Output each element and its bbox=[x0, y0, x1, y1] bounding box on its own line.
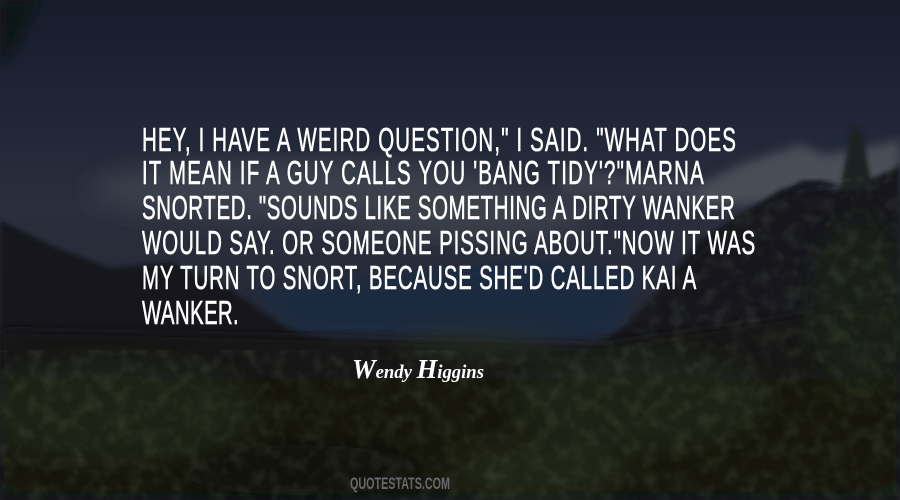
line 5: MY TURN TO SNORT, BECAUSE SHE'D CALLED KAI A bbox=[142, 259, 697, 296]
line 2: IT MEAN IF A GUY CALLS YOU 'BANG TIDY'?"MARNA bbox=[142, 154, 704, 191]
watermark: QUOTESTATS.COM bbox=[350, 474, 450, 493]
left hills bbox=[0, 220, 330, 500]
line 6: WANKER. bbox=[142, 294, 239, 331]
lake bbox=[250, 260, 640, 350]
foliage texture bbox=[0, 166, 900, 500]
foliage top left bbox=[0, 0, 38, 66]
quote text bbox=[142, 121, 755, 331]
author signature: Wendy Higgins bbox=[352, 354, 484, 384]
right hills bbox=[590, 165, 900, 500]
line 4: WOULD SAY. OR SOMEONE PISSING ABOUT."NOW IT WAS bbox=[142, 224, 755, 261]
line 1: HEY, I HAVE A WEIRD QUESTION," I SAID. "WHAT DOES bbox=[142, 121, 736, 158]
foreground valley bbox=[0, 300, 900, 500]
line 3: SNORTED. "SOUNDS LIKE SOMETHING A DIRTY WANKER bbox=[142, 189, 735, 226]
